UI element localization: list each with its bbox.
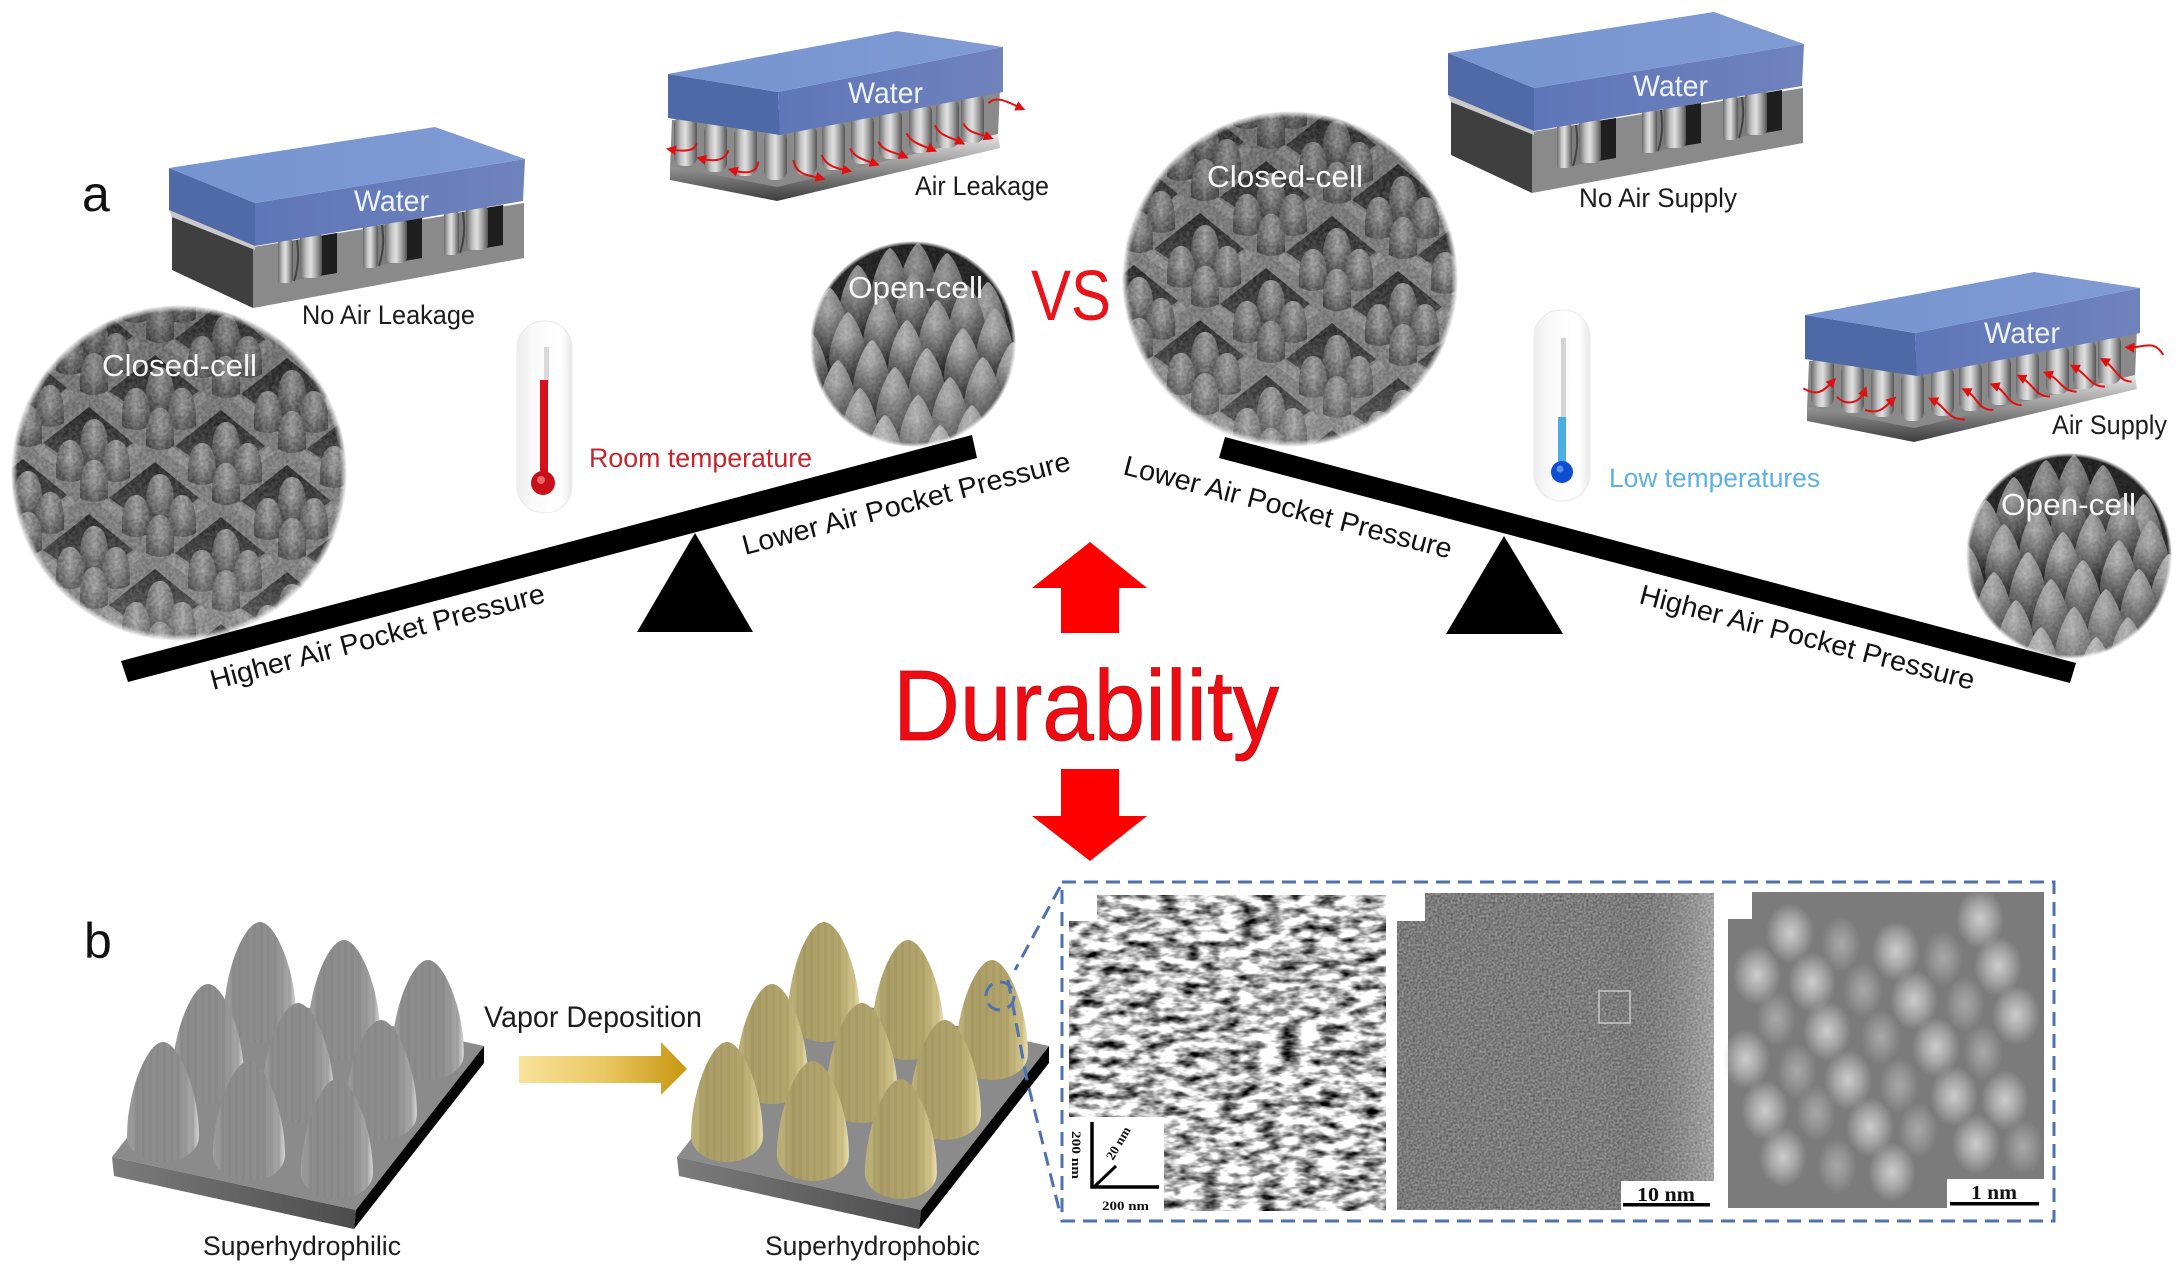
label: Low temperatures: Low temperatures [1609, 463, 1820, 493]
fulcrum, left [637, 533, 753, 632]
caption: Superhydrophilic: Superhydrophilic [203, 1231, 401, 1261]
label: Closed-cell, right: Closed-cell [1207, 159, 1363, 194]
microscopy panel: 10 nm lattice image [1397, 893, 1716, 1212]
schematic: air leakage with red arrows [668, 31, 1022, 201]
caption: No Air Supply: No Air Supply [1579, 183, 1737, 213]
icon: thermometer, room temperature [517, 321, 572, 513]
SEM image: closed-cell, right [1082, 51, 1514, 525]
microscopy panel: rough coating surface [1069, 893, 1386, 1213]
balance beam, right [1219, 437, 2076, 683]
scale label: 200 nm horizontal: 200 nm [1102, 1198, 1149, 1213]
microscopy panel: 1 nm atomic image [1722, 885, 2052, 1216]
callout: dashed zoom lines and circle on cone [986, 887, 1060, 1213]
beam text: Higher Air Pocket Pressure, right: Higher Air Pocket Pressure [1636, 579, 1978, 696]
arrow: up, red [1032, 542, 1147, 633]
label: Vapor Deposition: Vapor Deposition [484, 1001, 702, 1034]
arrow: down, red [1032, 769, 1147, 861]
SEM image: closed-cell, left [0, 245, 403, 719]
heading: VS: VS [1031, 257, 1111, 336]
beam text: Lower Air Pocket Pressure, left: Lower Air Pocket Pressure [739, 446, 1074, 561]
panel a: closed and open cell balance comparison [0, 12, 2182, 719]
scale label: 20 nm diagonal: 20 nm [1103, 1124, 1134, 1162]
schematic: no air supply: Water [1633, 70, 1708, 103]
scale label: 10 nm: 10 nm [1637, 1184, 1695, 1206]
beam text: Lower Air Pocket Pressure, right: Lower Air Pocket Pressure [1120, 450, 1455, 564]
label: Room temperature: Room temperature [589, 443, 812, 473]
caption: Air Supply: Air Supply [2052, 410, 2167, 440]
beam text: Higher Air Pocket Pressure, left: Higher Air Pocket Pressure [207, 578, 548, 696]
schematic: no air supply [1448, 12, 1804, 193]
label: b: b [84, 913, 112, 969]
schematic: no air leakage: Water [354, 185, 429, 218]
arrow: vapor deposition, gold [519, 1042, 687, 1095]
SEM image: open-cell, left [791, 239, 1032, 493]
callout: dashed blue frame [1062, 882, 2054, 1221]
scale label: 1 nm: 1 nm [1971, 1182, 2017, 1204]
caption: No Air Leakage: No Air Leakage [302, 300, 475, 330]
caption: Superhydrophobic: Superhydrophobic [765, 1231, 980, 1261]
icon: thermometer, low temperatures [1534, 310, 1590, 501]
schematic: air supply with red arrows [1803, 272, 2163, 442]
heading: Durability: Durability [893, 650, 1279, 762]
label: a: a [82, 166, 110, 222]
schematic: no air leakage [169, 127, 525, 308]
illustration: superhydrophobic gold cones on plate [677, 922, 1049, 1229]
label: Open-cell, left: Open-cell [848, 270, 983, 305]
illustration: superhydrophilic gray cones on plate [112, 922, 484, 1229]
balance beam, left [121, 435, 977, 682]
fulcrum, right [1446, 536, 1563, 634]
SEM image: open-cell, right [1947, 451, 2182, 705]
scale label: 200 nm vertical: 200 nm [1069, 1131, 1084, 1179]
schematic: air supply with red arrows: Water [1984, 317, 2060, 350]
caption: Air Leakage: Air Leakage [915, 171, 1049, 201]
scale axes [1092, 1122, 1159, 1187]
schematic: air leakage with red arrows: Water [848, 77, 923, 110]
label: Closed-cell, left: Closed-cell [102, 348, 257, 383]
panel b: surface coating and microscopy [84, 882, 2054, 1261]
label: Open-cell, right: Open-cell [2001, 487, 2136, 522]
